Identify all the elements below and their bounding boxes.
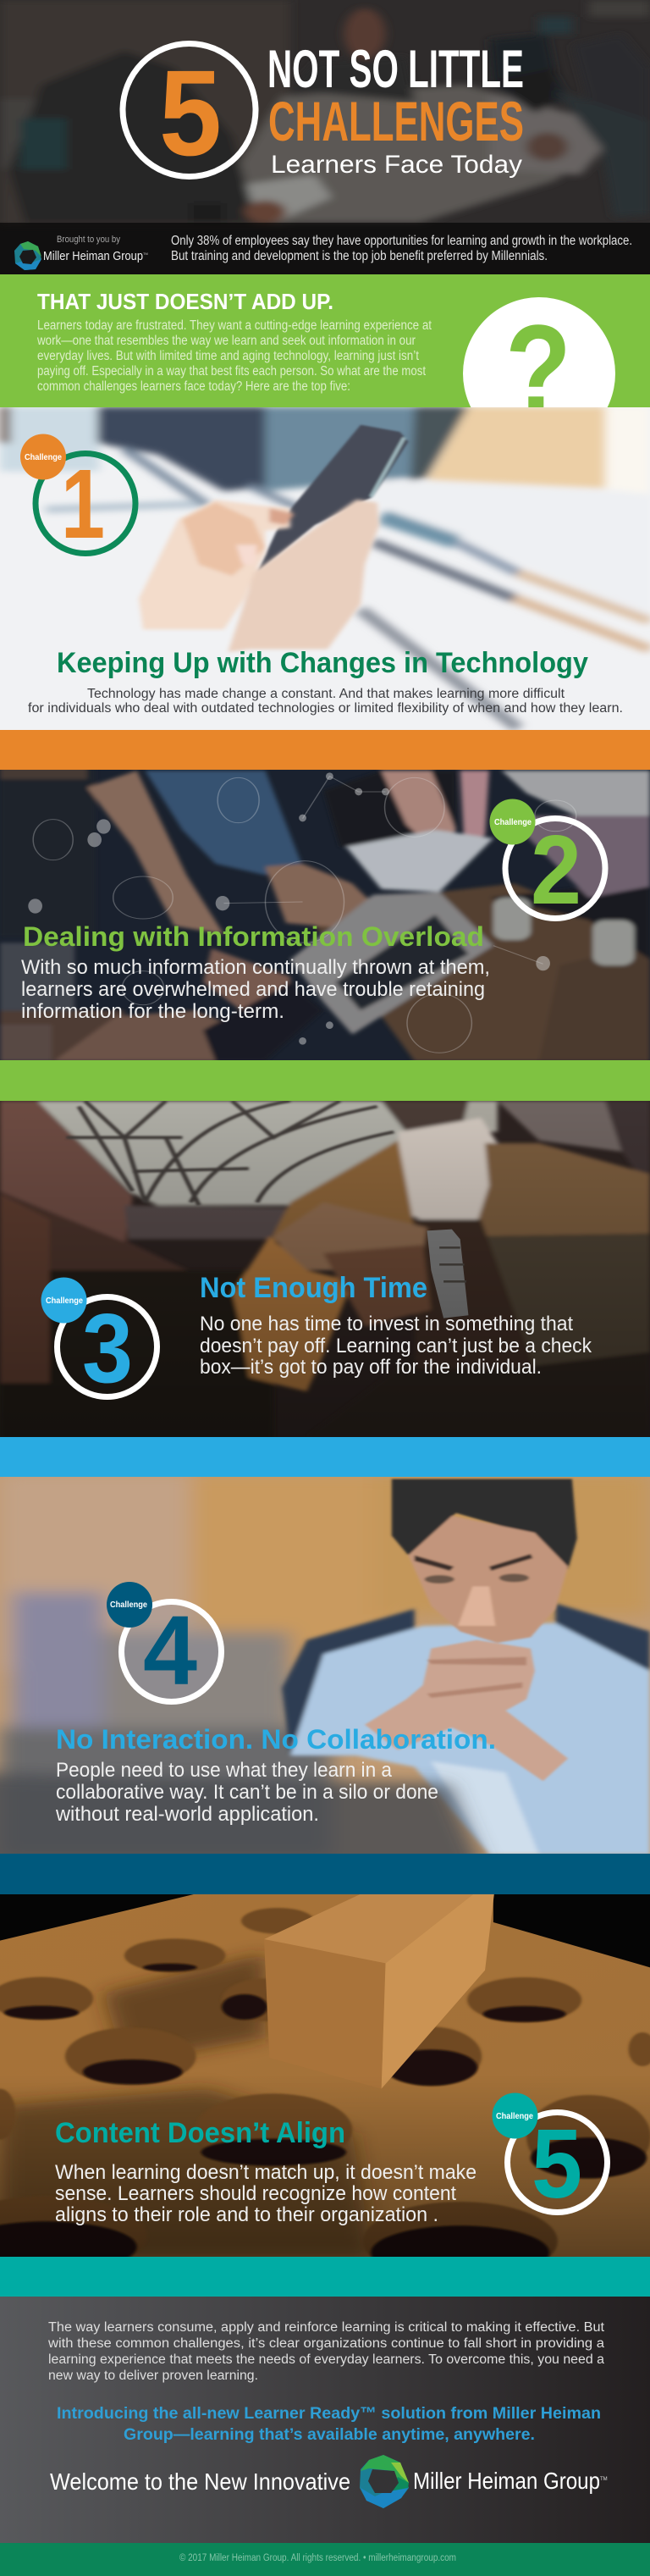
body text bbox=[28, 687, 623, 716]
body text bbox=[200, 1313, 592, 1379]
heading: Content Doesn’t Align bbox=[55, 2117, 345, 2149]
body text: People need to use what they learn in a bbox=[56, 1759, 393, 1782]
icon: Miller Heiman Group logo large bbox=[360, 2455, 409, 2508]
body text: everyday lives. But with limited time and aging technology, learning just isn’t bbox=[37, 349, 420, 363]
big ring with number 5: 5 bbox=[159, 45, 222, 181]
body text bbox=[21, 956, 490, 1023]
panel: challenge 1 keeping up with changes in technology bbox=[0, 406, 650, 730]
icon: challenge 3 badge and ring: Challenge bbox=[46, 1296, 83, 1306]
photo: team around a laptop with data overlay bbox=[0, 762, 650, 1061]
icon: challenge 2 badge and ring: 2 bbox=[531, 815, 581, 925]
panel: challenge 4 no interaction no collaboration bbox=[0, 1473, 650, 1882]
heading: Not Enough Time bbox=[200, 1272, 427, 1304]
title: not so little challenges learners face today: CHALLENGES bbox=[268, 90, 524, 152]
panel: that just doesn't add up bbox=[0, 274, 650, 407]
body text: With so much information continually thrown at them, bbox=[21, 956, 490, 979]
icon: challenge 4 badge and ring: Challenge bbox=[110, 1600, 147, 1610]
icon: challenge 3 badge and ring bbox=[41, 1277, 157, 1403]
strip: dark band behind intro stat bbox=[0, 223, 650, 274]
body text: aligns to their role and to their organization . bbox=[55, 2203, 438, 2226]
welcome line with logo: Welcome to the New Innovative bbox=[50, 2468, 350, 2495]
introduction callout: Group—learning that’s available anytime, anywhere. bbox=[124, 2425, 535, 2444]
photo: man checking his watch under a glass roof bbox=[0, 1101, 650, 1440]
body text bbox=[55, 2161, 476, 2226]
introduction callout bbox=[57, 2404, 601, 2444]
body text: without real-world application. bbox=[55, 1803, 319, 1826]
welcome line with logo: TM bbox=[600, 2477, 608, 2482]
body text: collaborative way. It can’t be in a silo or done bbox=[56, 1781, 438, 1804]
panel: challenge 3 not enough time bbox=[0, 1101, 650, 1440]
icon: question mark in white circle: ? bbox=[505, 298, 571, 440]
body text: information for the long-term. bbox=[21, 1000, 284, 1023]
body text: Technology has made change a constant. And that makes learning more difficult bbox=[87, 687, 565, 701]
sponsor: brought to you by Miller Heiman Group: Brought to you by bbox=[57, 235, 120, 245]
title: not so little challenges learners face today: Learners Face Today bbox=[271, 151, 522, 179]
photo: hands holding a smartphone bbox=[0, 406, 650, 730]
body text: for individuals who deal with outdated technologies or limited flexibility of when and how they learn. bbox=[28, 701, 623, 716]
heading: No Interaction. No Collaboration. bbox=[56, 1724, 496, 1755]
panel: footer copyright bbox=[0, 2543, 650, 2576]
icon: question mark in white circle bbox=[463, 297, 615, 407]
stat text bbox=[171, 234, 632, 263]
icon: challenge 5 badge and ring: 5 bbox=[532, 2109, 582, 2219]
welcome line with logo: Miller Heiman Group bbox=[413, 2468, 600, 2494]
divider bar: orange bbox=[0, 730, 650, 770]
divider bar: blue bbox=[0, 1437, 650, 1477]
icon: challenge 2 badge and ring bbox=[489, 799, 605, 925]
closing body text bbox=[47, 2320, 605, 2383]
body text: box—it’s got to pay off for the individual. bbox=[200, 1356, 542, 1379]
icon: challenge 2 badge and ring: Challenge bbox=[494, 818, 532, 827]
closing body text: with these common challenges, it’s clear organizations continue to fall short in providing a bbox=[47, 2336, 604, 2351]
photo: thoughtful woman with clasped hands bbox=[0, 1473, 650, 1882]
divider bar: navy bbox=[0, 1854, 650, 1894]
body text: learners are overwhelmed and have trouble retaining bbox=[21, 978, 485, 1001]
sponsor: brought to you by Miller Heiman Group bbox=[14, 235, 148, 270]
closing body text: new way to deliver proven learning. bbox=[48, 2369, 258, 2383]
closing body text: learning experience that meets the needs of everyday learners. To overcome this, you need a bbox=[48, 2352, 604, 2367]
panel: closing message bbox=[0, 2297, 650, 2543]
body text bbox=[55, 1759, 438, 1826]
heading: Keeping Up with Changes in Technology bbox=[57, 647, 588, 679]
welcome line with logo bbox=[50, 2455, 608, 2508]
icon: challenge 5 badge and ring: Challenge bbox=[496, 2112, 533, 2121]
icon: challenge 4 badge and ring: 4 bbox=[143, 1595, 197, 1705]
divider bar: teal bbox=[0, 2257, 650, 2297]
body text: When learning doesn’t match up, it doesn’t make bbox=[55, 2161, 476, 2184]
body text: Learners today are frustrated. They want a cutting-edge learning experience at bbox=[37, 318, 432, 333]
body text: doesn’t pay off. Learning can’t just be a check bbox=[200, 1335, 592, 1357]
big ring with number 5 bbox=[123, 44, 256, 181]
hero photo: classroom of learners bbox=[0, 0, 650, 227]
icon: challenge 3 badge and ring: 3 bbox=[82, 1293, 133, 1403]
body text: work—one that resembles the way we learn and seek out information in our bbox=[36, 334, 416, 348]
divider bar: green bbox=[0, 1060, 650, 1101]
heading: THAT JUST DOESN’T ADD UP. bbox=[37, 289, 333, 314]
closing body text: The way learners consume, apply and reinforce learning is critical to making it effective. But bbox=[48, 2320, 605, 2335]
panel: challenge 5 content doesn't align bbox=[0, 1894, 650, 2280]
sponsor: brought to you by Miller Heiman Group: Miller Heiman Group bbox=[43, 250, 143, 263]
body text: sense. Learners should recognize how content bbox=[55, 2182, 456, 2205]
panel: footer copyright: © 2017 Miller Heiman Group. All rights reserved. • millerheimangroup.com bbox=[179, 2553, 456, 2563]
body text: paying off. Especially in a way that best fits each person. So what are the most bbox=[37, 364, 427, 379]
title: not so little challenges learners face today bbox=[267, 40, 524, 179]
photo: square peg on a board of round holes bbox=[0, 1894, 650, 2280]
body text: common challenges learners face today? Here are the top five: bbox=[37, 379, 350, 394]
introduction callout: Introducing the all-new Learner Ready™ solution from Miller Heiman bbox=[57, 2404, 601, 2423]
icon: challenge 1 badge and ring: 1 bbox=[61, 449, 105, 559]
body text: No one has time to invest in something that bbox=[200, 1313, 573, 1335]
heading: Dealing with Information Overload bbox=[23, 921, 484, 952]
icon: challenge 5 badge and ring bbox=[493, 2093, 608, 2219]
sponsor: brought to you by Miller Heiman Group: TM bbox=[143, 252, 148, 256]
panel: challenge 2 dealing with information overload bbox=[0, 762, 650, 1061]
body text bbox=[36, 318, 432, 394]
icon: challenge 4 badge and ring bbox=[107, 1582, 222, 1705]
icon: challenge 1 badge and ring: Challenge bbox=[25, 453, 62, 462]
icon: challenge 1 badge and ring bbox=[20, 434, 135, 559]
panel: hero header bbox=[0, 0, 650, 274]
stat text: But training and development is the top job benefit preferred by Millennials. bbox=[171, 249, 548, 263]
icon: Miller Heiman Group logo bbox=[14, 241, 41, 270]
